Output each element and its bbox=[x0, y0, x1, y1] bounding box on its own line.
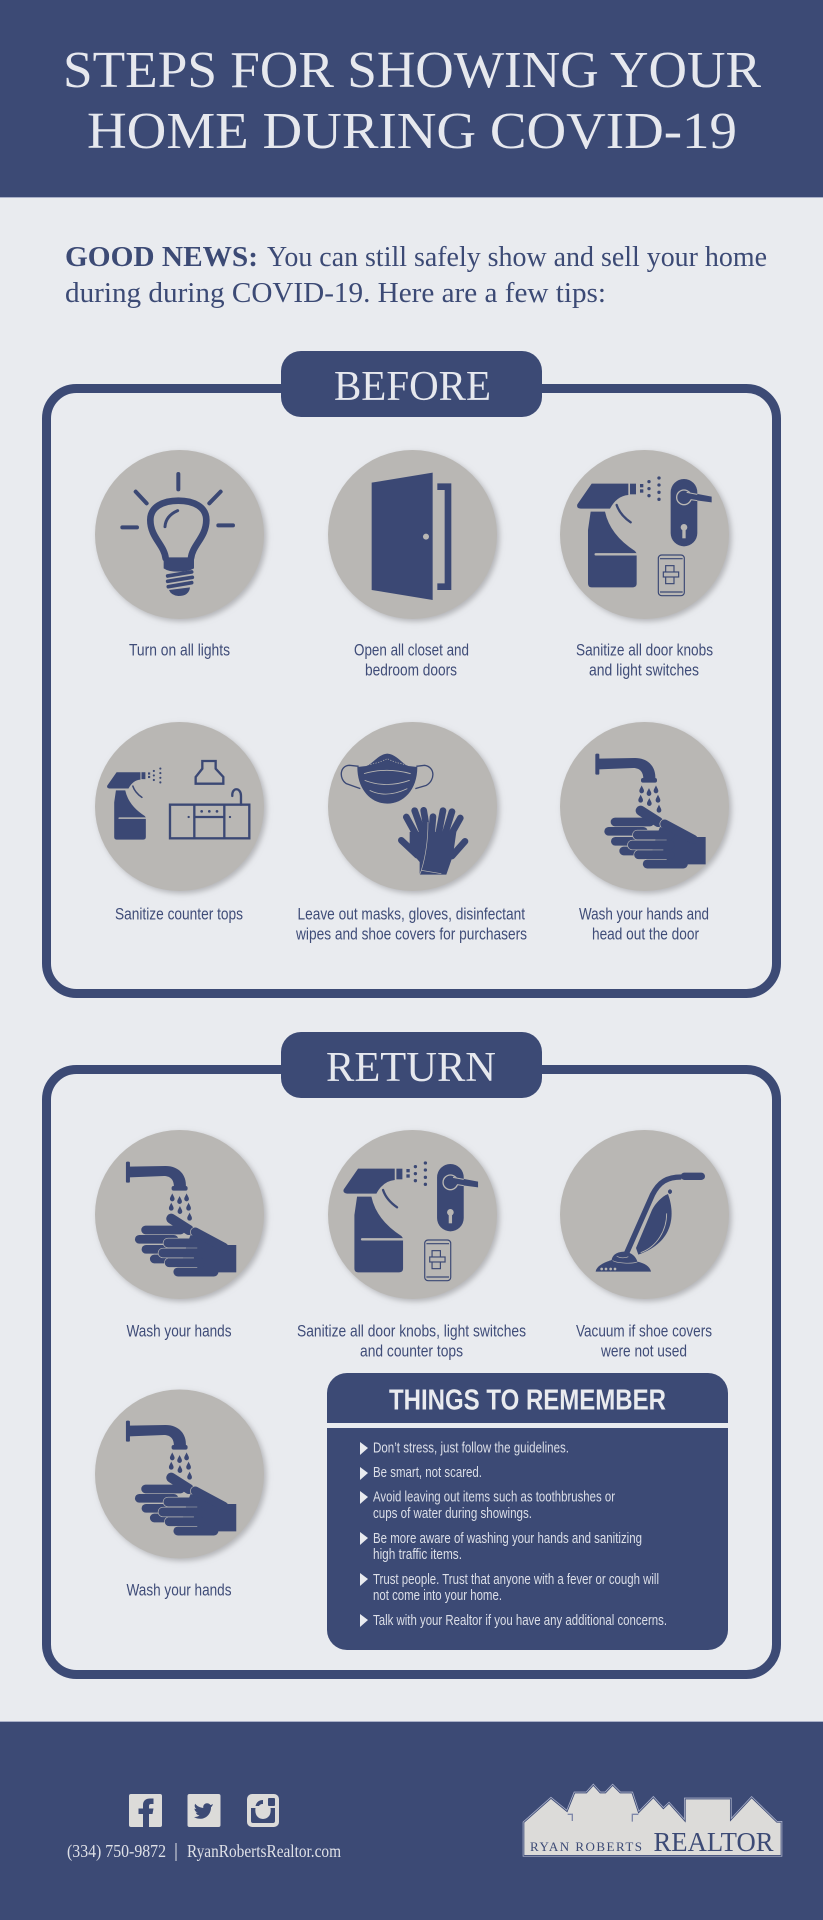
bullet list: Be more aware of washing your hands and sanitizing bbox=[373, 1531, 642, 1547]
panel: things to remember bbox=[327, 1373, 728, 1650]
label bbox=[576, 1322, 712, 1360]
intro text bbox=[65, 241, 767, 309]
title: STEPS FOR SHOWING YOUR bbox=[63, 42, 761, 99]
label: wipes and shoe covers for purchasers bbox=[295, 924, 527, 944]
intro text: during during COVID-19. Here are a few tips: bbox=[65, 277, 606, 309]
label: Sanitize all door knobs, light switches bbox=[297, 1322, 526, 1340]
panel: before bbox=[46, 351, 776, 994]
heading: before: BEFORE bbox=[334, 364, 491, 410]
icon: spray, door handle, light switch bbox=[343, 1161, 478, 1281]
step: vacuum bbox=[560, 1130, 729, 1360]
label bbox=[297, 1322, 526, 1360]
label: and counter tops bbox=[360, 1342, 463, 1360]
label: Leave out masks, gloves, disinfectant bbox=[298, 904, 525, 924]
bullet list: Avoid leaving out items such as toothbrushes or bbox=[373, 1490, 615, 1506]
step: wash and head out bbox=[560, 722, 729, 944]
footer bbox=[0, 1721, 823, 1920]
bullet list: cups of water during showings. bbox=[373, 1506, 532, 1522]
step: sanitize knobs and switches bbox=[560, 450, 729, 680]
icon: light bulb bbox=[122, 474, 233, 596]
icon: hand washing bbox=[126, 1162, 236, 1276]
label: Open all closet and bbox=[354, 640, 469, 660]
logo: Ryan Roberts Realtor: RYAN ROBERTS bbox=[530, 1839, 642, 1854]
title bbox=[63, 42, 761, 160]
contact line: RyanRobertsRealtor.com bbox=[187, 1841, 341, 1861]
label: Wash your hands and bbox=[579, 904, 709, 924]
logo: Ryan Roberts Realtor bbox=[524, 1786, 781, 1857]
label: Sanitize all door knobs bbox=[576, 640, 713, 660]
step: sanitize counter tops bbox=[95, 722, 264, 924]
header banner bbox=[0, 0, 823, 198]
step: sanitize all bbox=[297, 1130, 526, 1360]
label bbox=[354, 640, 469, 680]
icon: facebook bbox=[129, 1794, 162, 1827]
icon: mask and gloves bbox=[341, 754, 465, 875]
label: Turn on all lights bbox=[129, 640, 230, 660]
icon: hand washing bbox=[595, 754, 706, 868]
label: Wash your hands bbox=[126, 1322, 232, 1340]
icon: open door bbox=[372, 473, 448, 600]
label: bedroom doors bbox=[365, 660, 457, 680]
icon: spray, door handle, light switch bbox=[577, 476, 712, 596]
step: masks and gloves bbox=[295, 722, 527, 944]
bullet list bbox=[360, 1440, 667, 1629]
icon: instagram bbox=[247, 1794, 279, 1827]
label bbox=[579, 904, 709, 944]
label bbox=[295, 904, 527, 944]
title: HOME DURING COVID-19 bbox=[87, 103, 737, 160]
label: Sanitize counter tops bbox=[115, 904, 243, 924]
heading: before bbox=[281, 351, 542, 417]
intro text: You can still safely show and sell your home bbox=[267, 241, 767, 273]
logo: Ryan Roberts Realtor: REALTOR bbox=[654, 1827, 774, 1857]
label: Vacuum if shoe covers bbox=[576, 1322, 712, 1340]
step: open doors bbox=[328, 450, 497, 680]
label: were not used bbox=[600, 1342, 687, 1360]
bullet list: Trust people. Trust that anyone with a fever or cough will bbox=[373, 1572, 659, 1588]
icon: twitter bbox=[188, 1794, 220, 1827]
contact line: (334) 750-9872 bbox=[67, 1841, 166, 1861]
label: head out the door bbox=[592, 924, 699, 944]
step: wash hands bbox=[95, 1130, 264, 1340]
intro text: GOOD NEWS: bbox=[65, 241, 258, 273]
step: turn on all lights bbox=[95, 450, 264, 660]
bullet list: Don’t stress, just follow the guidelines. bbox=[373, 1440, 569, 1456]
bullet list: not come into your home. bbox=[373, 1588, 502, 1604]
bullet list: high traffic items. bbox=[373, 1547, 462, 1563]
label: and light switches bbox=[589, 660, 699, 680]
label bbox=[576, 640, 713, 680]
label: Wash your hands bbox=[126, 1580, 232, 1600]
contact line bbox=[67, 1841, 341, 1861]
panel: return bbox=[46, 1032, 776, 1674]
step: wash hands again bbox=[95, 1390, 264, 1600]
heading: things to remember: THINGS TO REMEMBER bbox=[389, 1384, 666, 1416]
icon: spray and kitchen bbox=[107, 761, 249, 840]
heading: return bbox=[281, 1032, 542, 1098]
icon: hand washing bbox=[126, 1421, 236, 1535]
bullet list: Talk with your Realtor if you have any additional concerns. bbox=[373, 1613, 667, 1629]
icon: vacuum bbox=[596, 1173, 705, 1272]
bullet list: Be smart, not scared. bbox=[373, 1465, 482, 1481]
heading: return: RETURN bbox=[326, 1045, 496, 1091]
